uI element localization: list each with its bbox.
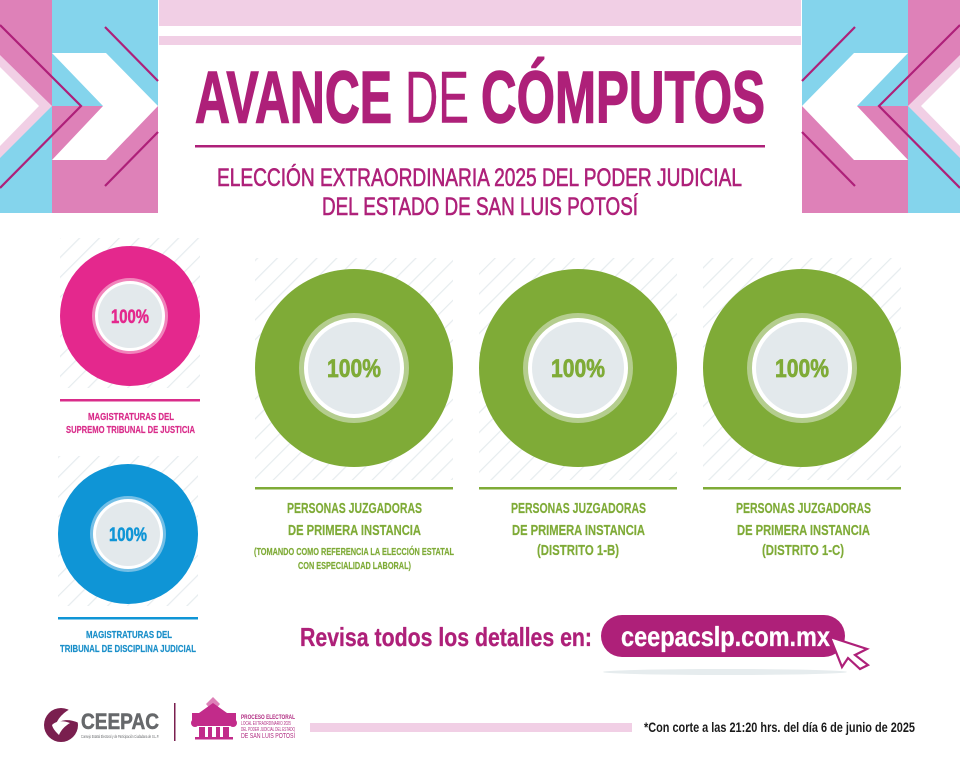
title rule xyxy=(195,145,765,148)
label: 1-C: (DISTRITO 1-C) xyxy=(762,543,844,559)
label: disciplina: TRIBUNAL DE DISCIPLINA JUDICIAL xyxy=(60,643,196,655)
right banner decoration xyxy=(802,0,960,213)
panel: distrito 1-C xyxy=(703,258,901,559)
label: 1-B xyxy=(511,501,646,559)
logo: CEEPAC: Consejo Estatal Electoral y de Participación Ciudadana de S.L.P. xyxy=(81,734,159,739)
logo divider xyxy=(174,703,176,741)
top bands xyxy=(159,0,801,45)
website button shadow xyxy=(603,669,847,675)
logo: proceso electoral: DEL PODER JUDICIAL DEL ESTADO xyxy=(241,727,295,733)
label: laboral: PERSONAS JUZGADORAS xyxy=(287,501,422,517)
donut chart: 1-B 100% xyxy=(479,269,677,467)
label: 1-B: (DISTRITO 1-B) xyxy=(537,543,619,559)
title: CÓMPUTOS xyxy=(481,58,765,138)
rule: 1-C xyxy=(703,487,901,490)
icon: cursor arrow xyxy=(830,637,868,669)
donut chart: laboral 100%: 100% xyxy=(327,355,381,383)
hatched background: 1-C xyxy=(703,258,901,480)
icon: CEEPAC swirl xyxy=(44,706,79,742)
call to action text: Revisa todos los detalles en: xyxy=(300,622,592,652)
logo: proceso electoral: PROCESO ELECTORAL xyxy=(241,714,295,721)
label: supremo: SUPREMO TRIBUNAL DE JUSTICIA xyxy=(66,424,195,436)
donut chart: laboral 100% xyxy=(255,269,453,467)
website button: ceepacslp.com.mx xyxy=(621,621,830,652)
website button xyxy=(601,615,845,657)
label: laboral: (TOMANDO COMO REFERENCIA LA ELECCIÓN ESTATAL xyxy=(254,545,454,558)
subtitle: DEL ESTADO DE SAN LUIS POTOSÍ xyxy=(322,192,638,221)
hatched background: supremo xyxy=(60,238,200,388)
title: DE xyxy=(405,58,469,138)
subtitle xyxy=(217,163,742,221)
footer band xyxy=(310,723,632,732)
logo: proceso electoral: LOCAL EXTRAORDINARIO 2025 xyxy=(241,721,291,727)
hatched background: laboral xyxy=(255,258,453,480)
hatched background: 1-B xyxy=(479,258,677,480)
label: 1-B: DE PRIMERA INSTANCIA xyxy=(512,523,645,539)
label: 1-B: PERSONAS JUZGADORAS xyxy=(511,501,646,517)
donut chart: supremo 100%: 100% xyxy=(111,307,149,328)
logo: proceso electoral xyxy=(191,697,295,740)
subtitle: ELECCIÓN EXTRAORDINARIA 2025 DEL PODER JUDICIAL xyxy=(217,163,742,192)
rule: laboral xyxy=(255,487,453,490)
label: 1-C xyxy=(736,501,871,559)
label: supremo: MAGISTRATURAS DEL xyxy=(88,411,174,423)
rule: 1-B xyxy=(479,487,677,490)
label: 1-C: PERSONAS JUZGADORAS xyxy=(736,501,871,517)
title xyxy=(195,58,765,138)
panel: distrito 1-B xyxy=(479,258,677,559)
label: disciplina xyxy=(60,629,196,655)
donut chart: disciplina 100% xyxy=(58,464,198,604)
left banner decoration xyxy=(0,0,158,213)
label: 1-C: DE PRIMERA INSTANCIA xyxy=(737,523,870,539)
panel: disciplina judicial xyxy=(58,456,198,655)
donut chart: supremo 100% xyxy=(60,246,200,386)
icon: palace xyxy=(191,697,237,740)
rule: supremo xyxy=(60,399,200,402)
logo: CEEPAC: CEEPAC xyxy=(81,709,159,734)
label: disciplina: MAGISTRATURAS DEL xyxy=(86,629,172,641)
label: supremo xyxy=(66,411,195,436)
panel: supremo tribunal xyxy=(60,238,200,436)
donut chart: 1-C 100%: 100% xyxy=(775,355,829,383)
donut chart: 1-C 100% xyxy=(703,269,901,467)
donut chart: 1-B 100%: 100% xyxy=(551,355,605,383)
logo: CEEPAC xyxy=(44,706,159,742)
panel: primera instancia laboral xyxy=(254,258,454,572)
title: AVANCE xyxy=(195,58,392,138)
logo: proceso electoral: DE SAN LUIS POTOSÍ xyxy=(241,731,295,740)
hatched background: disciplina xyxy=(58,456,198,606)
label: laboral xyxy=(254,501,454,572)
label: laboral: CON ESPECIALIDAD LABORAL) xyxy=(298,560,411,572)
label: laboral: DE PRIMERA INSTANCIA xyxy=(288,523,421,539)
rule: disciplina xyxy=(58,617,198,620)
donut chart: disciplina 100%: 100% xyxy=(109,525,147,546)
